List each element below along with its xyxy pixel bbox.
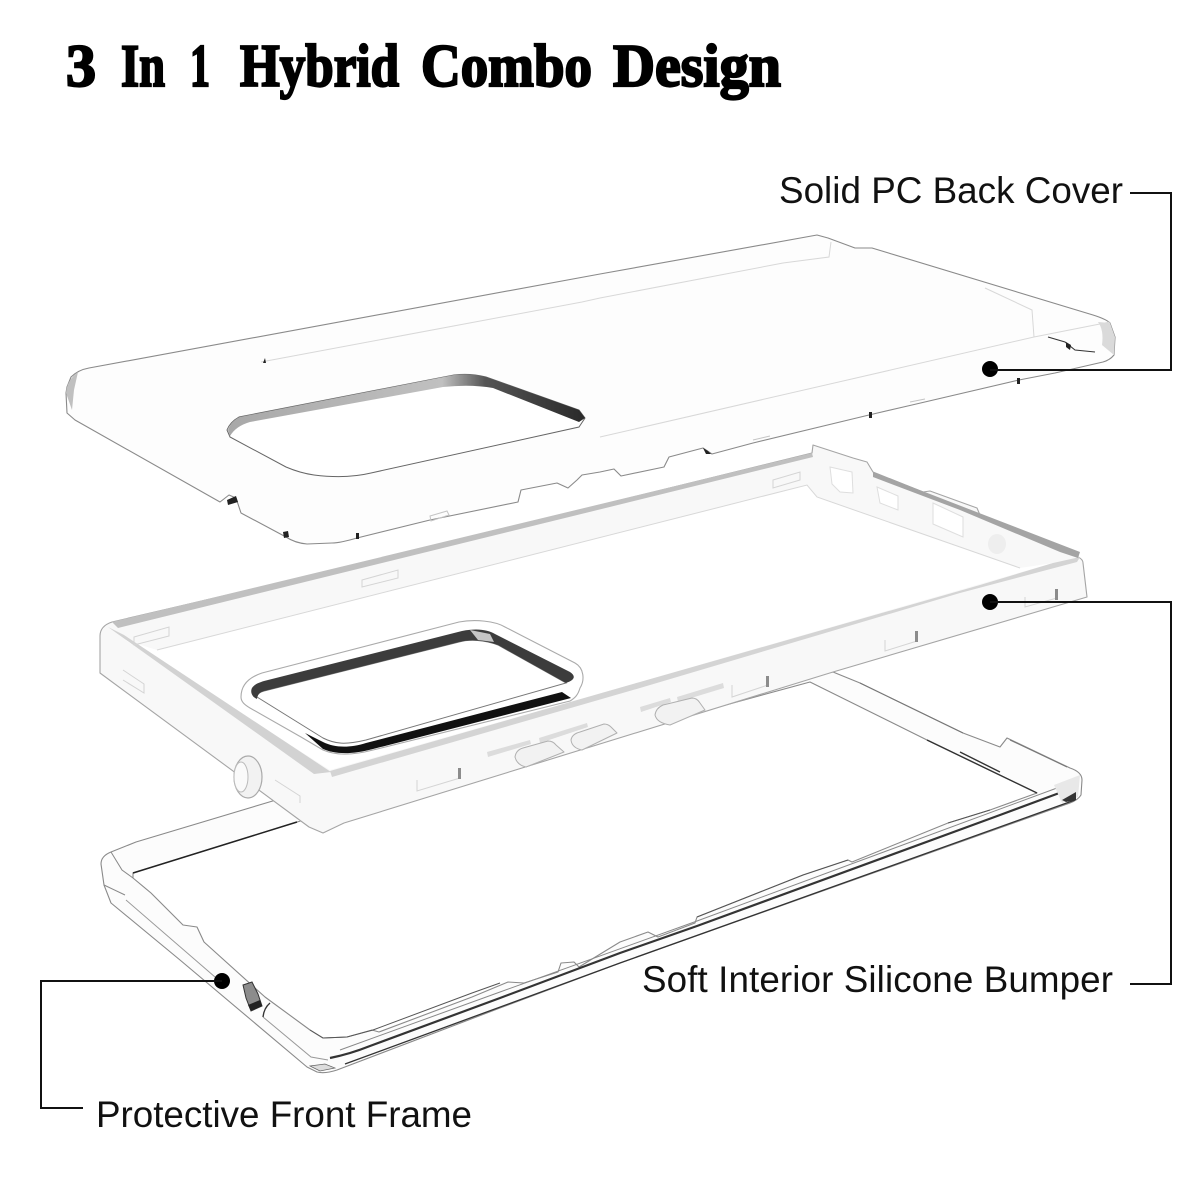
frame rails: dark lines	[133, 822, 297, 873]
bumper interior opening	[125, 485, 1053, 770]
back cover illustration	[66, 235, 1115, 544]
bumper slots	[487, 683, 724, 757]
frame: dark clip	[243, 982, 262, 1011]
bumper grey inner bands	[112, 453, 813, 628]
title: 1	[190, 33, 210, 99]
callout: bumper leader	[982, 594, 1171, 984]
bumper right wall windows	[830, 467, 963, 537]
front frame illustration	[101, 672, 1082, 1073]
silicone bumper illustration	[100, 445, 1087, 833]
bumper knob	[234, 756, 262, 798]
title: Design	[613, 33, 781, 99]
bumper small clip outlines	[123, 472, 1057, 803]
label: front frame: Protective Front Frame	[96, 1094, 472, 1135]
label: bumper: Soft Interior Silicone Bumper	[642, 959, 1113, 1000]
camera ring	[241, 621, 583, 754]
title: In	[121, 33, 165, 99]
title: Hybrid	[240, 33, 399, 99]
label: back cover: Solid PC Back Cover	[779, 170, 1123, 211]
callout: front frame leader	[41, 973, 230, 1108]
bumper side buttons	[515, 698, 705, 767]
title: 3	[66, 33, 96, 99]
callout: back cover leader	[982, 193, 1171, 377]
camera cutout	[227, 374, 585, 477]
cover faint details	[261, 242, 1110, 437]
title: Combo	[421, 33, 592, 99]
title	[66, 33, 781, 99]
